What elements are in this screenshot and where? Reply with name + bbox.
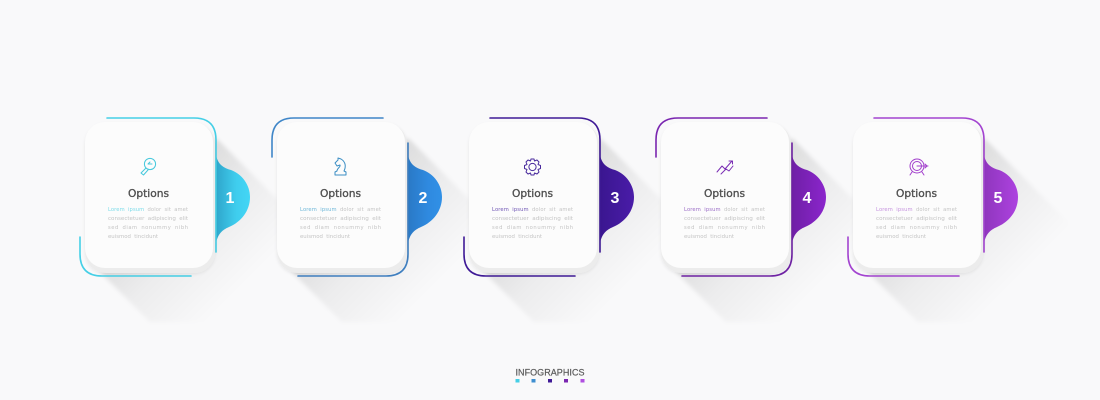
footer: infographics label [516,368,584,382]
text block: consectetuer adipiscing elit [492,216,573,222]
icon: chess knight [335,158,346,175]
text block: euismod tincidunt [492,234,542,240]
text block [684,207,765,240]
outline: bottom left bracket [80,237,191,276]
outline: bottom right bracket [298,143,408,276]
text block: sed diam nonummy nibh [684,225,765,231]
tab: step 3 number [600,155,634,243]
card body [85,123,215,273]
text block: consectetuer adipiscing elit [300,216,381,222]
tab: step 2 number [408,155,442,243]
outline: top right bracket [490,118,600,252]
text block: sed diam nonummy nibh [876,225,957,231]
text block: Lorem ipsum dolor sit amet [684,207,765,213]
text block: consectetuer adipiscing elit [108,216,188,222]
number: 5 [994,190,1003,207]
text block [108,207,188,240]
text block: euismod tincidunt [684,234,734,240]
outline: bottom left bracket [848,237,959,276]
outline: top right bracket [874,118,984,252]
tab: step 4 number [792,155,826,243]
heading: Options [128,187,169,200]
outline: top left bracket [272,118,383,157]
text block: consectetuer adipiscing elit [876,216,957,222]
heading: Options [704,187,745,200]
outline: top right bracket [107,118,216,252]
number: 3 [611,190,620,207]
heading: Options [512,187,553,200]
outline: bottom right bracket [682,143,792,276]
panel: step 5 [848,118,1068,322]
tab: step 5 number [984,155,1018,243]
number: 2 [419,190,428,207]
outline: bottom left bracket [464,237,575,276]
card body [661,123,791,273]
text block [300,207,381,240]
icon: gear [524,159,540,175]
text block: Lorem ipsum dolor sit amet [876,207,957,213]
text block: euismod tincidunt [876,234,926,240]
text block [876,207,957,240]
panel: step 3 [464,118,684,322]
number: 4 [803,190,812,207]
icon: trend arrows [717,161,733,174]
icon: magnifier [141,158,156,175]
panel: step 2 [272,118,492,322]
panel: step 4 [656,118,876,322]
outline: top left bracket [656,118,767,157]
text block: euismod tincidunt [108,234,158,240]
card body [469,123,599,273]
tab: step 1 number [216,155,250,243]
card body [853,123,983,273]
text block: Lorem ipsum dolor sit amet [492,207,573,213]
text block: euismod tincidunt [300,234,350,240]
text block: Lorem ipsum dolor sit amet [108,207,188,213]
text block: Lorem ipsum dolor sit amet [300,207,381,213]
text block: sed diam nonummy nibh [108,225,188,231]
text block: sed diam nonummy nibh [300,225,381,231]
text block: sed diam nonummy nibh [492,225,573,231]
panel: step 1 [80,118,300,322]
heading: Options [320,187,361,200]
text block: consectetuer adipiscing elit [684,216,765,222]
icon: target [910,159,928,175]
footer: infographics label: INFOGRAPHICS [516,368,584,378]
card body [277,123,407,273]
number: 1 [226,190,235,207]
heading: Options [896,187,937,200]
text block [492,207,573,240]
